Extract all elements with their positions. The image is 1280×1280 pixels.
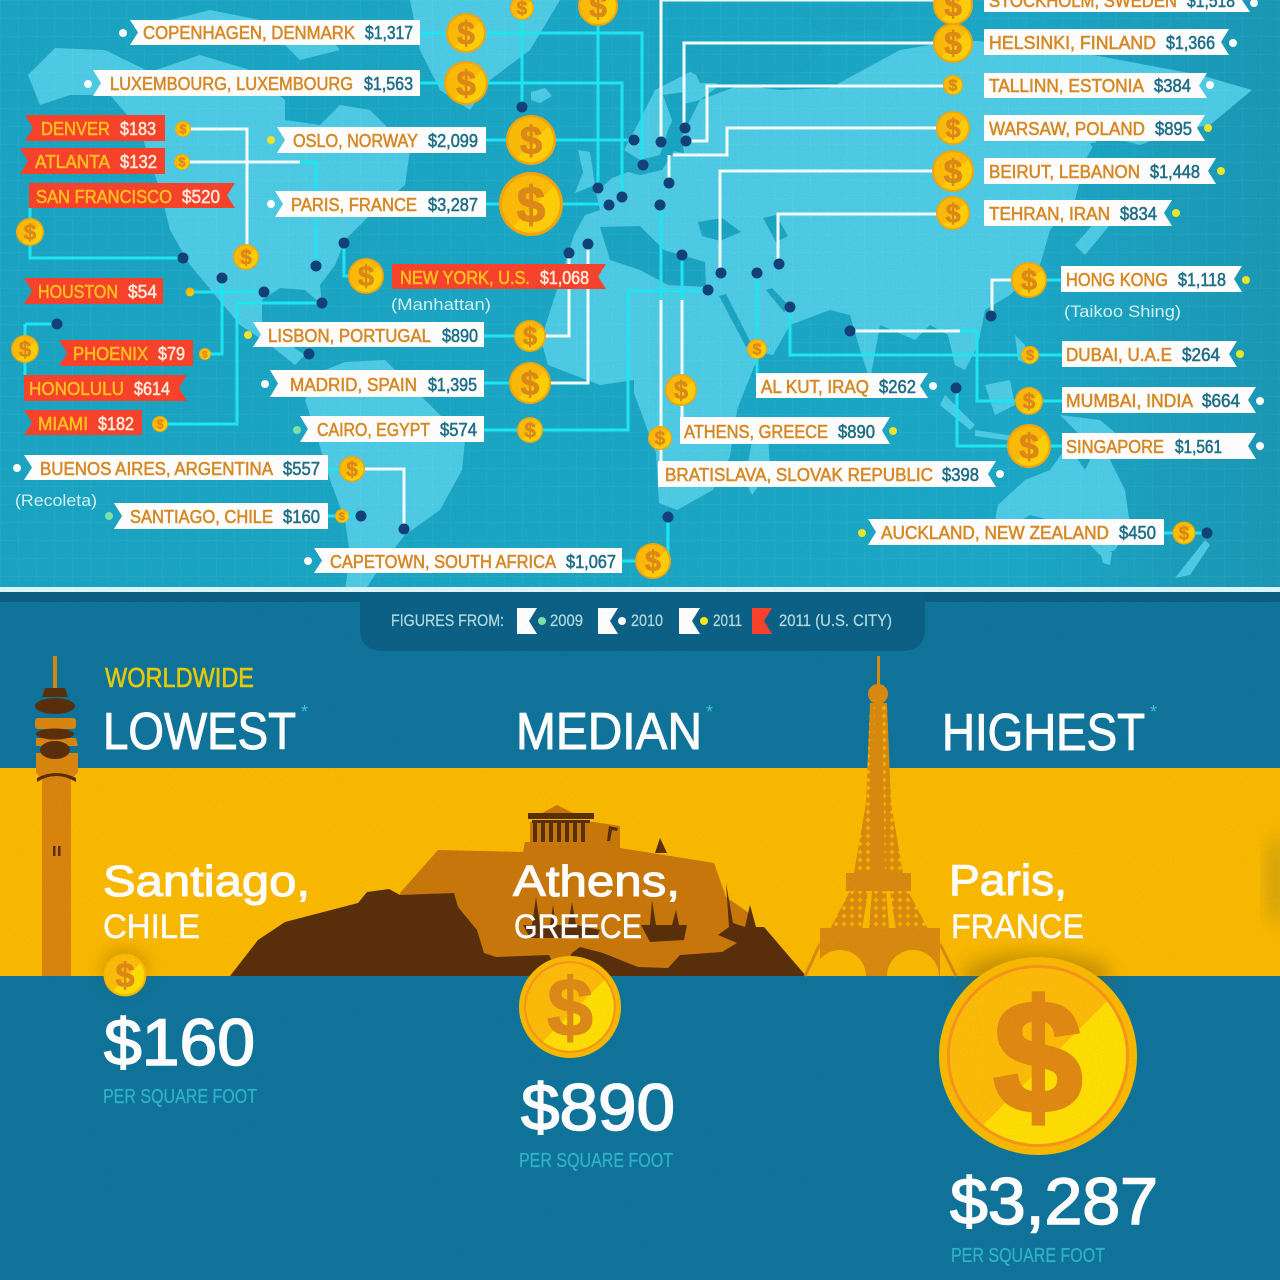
column: lowest: Santiago, <box>103 857 310 906</box>
city: Warsaw: WARSAW, POLAND <box>989 119 1145 139</box>
city: Buenos Aires: (Recoleta) <box>15 491 97 510</box>
US city: Phoenix: $ <box>202 349 208 360</box>
coin: top center markers <box>510 0 618 26</box>
city: Tallinn <box>943 73 1214 98</box>
US city: Miami: $ <box>156 416 164 431</box>
city: Al Kut <box>747 339 937 398</box>
city: Tehran <box>936 196 1180 230</box>
city: Paris: $ <box>517 176 545 233</box>
city: Hong Kong: $ <box>1021 265 1037 297</box>
city: Tehran: TEHRAN, IRAN <box>989 204 1110 224</box>
US city: Honolulu: $614 <box>134 379 170 399</box>
US city: Houston: HOUSTON <box>38 282 118 302</box>
US city: Phoenix: PHOENIX <box>73 344 148 364</box>
city: Helsinki: $ <box>944 25 962 61</box>
city: Lisbon <box>244 320 546 352</box>
city: Tallinn: TALLINN, ESTONIA <box>989 76 1144 96</box>
city: Lisbon: LISBON, PORTUGAL <box>268 326 431 346</box>
city: Madrid: MADRID, SPAIN <box>290 375 417 395</box>
city: Hong Kong: HONG KONG <box>1066 270 1168 290</box>
city: Luxembourg: LUXEMBOURG, LUXEMBOURG <box>110 74 353 94</box>
US city: Honolulu: $ <box>19 337 32 362</box>
city: Helsinki <box>933 23 1237 63</box>
city: Mumbai: MUMBAI, INDIA <box>1066 391 1193 411</box>
US city: San Francisco: $520 <box>182 187 220 207</box>
column: median: GREECE <box>514 908 642 946</box>
city: Helsinki: $1,366 <box>1166 33 1215 53</box>
column: median: $890 <box>521 1070 675 1144</box>
city: Copenhagen: $ <box>457 15 475 51</box>
column: highest: HIGHEST <box>942 704 1145 762</box>
column: lowest: CHILE <box>103 908 200 946</box>
city: Stockholm <box>933 0 1258 25</box>
US city: Atlanta: ATLANTA <box>35 152 110 172</box>
US city: Miami: MIAMI <box>38 414 88 434</box>
coin <box>939 957 1137 1155</box>
US city: Denver <box>25 115 191 141</box>
coin: $ <box>115 957 135 995</box>
US city: Denver: $183 <box>120 119 156 139</box>
column: lowest: * <box>301 702 308 722</box>
city: Athens: $ <box>674 377 688 405</box>
panel: world map <box>0 0 1280 590</box>
city: Tehran: $ <box>945 198 961 229</box>
column: median: PER SQUARE FOOT <box>519 1150 673 1172</box>
city: Al Kut: $262 <box>879 377 916 397</box>
city: Luxembourg: $ <box>456 64 476 103</box>
city: Mumbai <box>1015 387 1264 415</box>
city: Capetown: CAPETOWN, SOUTH AFRICA <box>330 552 556 572</box>
heading: worldwide: WORLDWIDE <box>105 662 254 693</box>
city: Singapore: $1,561 <box>1175 437 1222 457</box>
US city: Atlanta: $132 <box>120 152 157 172</box>
US city: Denver: $ <box>179 121 187 136</box>
column: median: Athens, <box>513 857 680 906</box>
city: Paris <box>267 172 563 236</box>
city: Dubai: $264 <box>1182 345 1220 365</box>
column: highest: FRANCE <box>951 908 1084 946</box>
column: lowest: LOWEST <box>103 703 296 761</box>
US city: Atlanta: $ <box>178 154 186 169</box>
city: Bratislava: $ <box>655 429 666 450</box>
city: Auckland: AUCKLAND, NEW ZEALAND <box>881 523 1109 543</box>
city: Hong Kong: $1,118 <box>1178 270 1226 290</box>
yellow band <box>0 768 1280 976</box>
city: Copenhagen <box>119 13 486 53</box>
US city: New York <box>348 258 606 314</box>
column: median: * <box>706 702 713 722</box>
smudge at right edge <box>1268 835 1280 925</box>
US city: Denver: DENVER <box>41 119 110 139</box>
city: Cairo: CAIRO, EGYPT <box>317 420 430 440</box>
city: Capetown: $ <box>645 546 661 578</box>
US city: San Francisco <box>16 183 235 246</box>
icon: Acropolis hill <box>230 805 806 976</box>
coin <box>519 956 621 1058</box>
city: Oslo: $2,099 <box>428 131 478 151</box>
coin <box>104 954 146 996</box>
city: Tallinn: $ <box>949 78 958 95</box>
column: lowest: PER SQUARE FOOT <box>103 1086 257 1108</box>
city: Warsaw: $ <box>945 113 961 144</box>
US city: Honolulu: HONOLULU <box>29 379 124 399</box>
city: Warsaw: $895 <box>1155 119 1192 139</box>
city: Santiago: $ <box>339 511 346 523</box>
city: Copenhagen: COPENHAGEN, DENMARK <box>143 23 355 43</box>
legend <box>360 592 925 651</box>
city: Dubai <box>1021 341 1244 367</box>
legend: 2010 <box>631 611 663 630</box>
city: Beirut: $1,448 <box>1150 162 1200 182</box>
column: median <box>513 702 713 1172</box>
US city: Miami <box>24 410 168 435</box>
city: Oslo <box>267 115 556 165</box>
column: highest: $3,287 <box>950 1164 1158 1238</box>
city: Cairo <box>293 416 543 443</box>
city: Auckland <box>858 519 1196 545</box>
city: Lisbon: $890 <box>442 326 478 346</box>
city: Luxembourg: $1,563 <box>364 74 413 94</box>
column: median: MEDIAN <box>516 703 702 761</box>
city: Buenos Aires: BUENOS AIRES, ARGENTINA <box>40 459 273 479</box>
city: Buenos Aires: $557 <box>283 459 320 479</box>
column: lowest <box>103 702 310 1108</box>
legend: 2009 <box>550 611 583 630</box>
panel: worldwide prices <box>0 587 1280 1280</box>
column: lowest: $160 <box>104 1005 255 1079</box>
city: Hong Kong <box>1011 262 1250 321</box>
city: Dubai: $ <box>1026 348 1034 364</box>
coin: $ <box>547 963 593 1054</box>
location dots <box>52 102 1212 538</box>
city: Cairo: $574 <box>440 420 477 440</box>
US city: New York: $ <box>358 261 374 293</box>
city: Singapore: $ <box>1019 427 1039 466</box>
column: highest <box>939 702 1158 1267</box>
US city: Houston <box>24 278 194 304</box>
column: highest: Paris, <box>949 856 1067 905</box>
city: Madrid: $ <box>521 366 540 403</box>
city: Singapore <box>1007 424 1264 468</box>
US city: Houston: $54 <box>128 282 157 302</box>
icon: Santiago tower <box>35 656 78 976</box>
column: highest: * <box>1150 702 1157 722</box>
city: Paris: $3,287 <box>428 195 478 215</box>
inland seas <box>600 6 1150 347</box>
US city: New York: (Manhattan) <box>391 295 491 314</box>
city: Al Kut: AL KUT, IRAQ <box>761 377 869 397</box>
city: Mumbai: $664 <box>1202 391 1240 411</box>
city: Dubai: DUBAI, U.A.E <box>1066 345 1172 365</box>
city: Santiago <box>105 503 349 529</box>
city: Tallinn: $384 <box>1154 76 1191 96</box>
city: Buenos Aires <box>13 455 365 510</box>
city: Beirut: $ <box>944 154 963 191</box>
city: Beirut <box>932 150 1225 192</box>
city: Madrid <box>261 362 551 404</box>
US city: Miami: $182 <box>98 414 134 434</box>
city: Lisbon: $ <box>523 323 537 351</box>
city: Bratislava: $398 <box>942 465 979 485</box>
city: Helsinki: HELSINKI, FINLAND <box>989 33 1156 53</box>
US city: San Francisco: SAN FRANCISCO <box>36 187 172 207</box>
city: Auckland: $450 <box>1119 523 1156 543</box>
coin: Denver map marker <box>233 244 259 270</box>
city: Mumbai: $ <box>1023 389 1036 414</box>
connector lines <box>25 0 1208 561</box>
city: Bratislava <box>648 426 1004 487</box>
legend: 2011 (U.S. CITY) <box>779 611 892 630</box>
city: Auckland: $ <box>1179 522 1189 543</box>
US city: Atlanta <box>20 148 190 174</box>
US city: San Francisco: $ <box>24 220 37 245</box>
coin: $ <box>994 968 1082 1145</box>
city: Warsaw <box>936 111 1212 145</box>
world map land masses <box>28 0 1252 590</box>
city: Paris: PARIS, FRANCE <box>291 195 417 215</box>
icon: Eiffel tower <box>805 656 956 976</box>
city: Athens <box>665 374 897 444</box>
city: Bratislava: BRATISLAVA, SLOVAK REPUBLIC <box>665 465 933 485</box>
legend: FIGURES FROM: <box>391 611 504 630</box>
city: Athens: ATHENS, GREECE <box>684 422 828 442</box>
column: highest: PER SQUARE FOOT <box>951 1245 1105 1267</box>
city: Al Kut: $ <box>753 342 762 359</box>
city: Santiago: $160 <box>283 507 320 527</box>
city: Copenhagen: $1,317 <box>365 23 413 43</box>
coin: Denver map marker: $ <box>240 246 252 269</box>
city: Hong Kong: (Taikoo Shing) <box>1064 302 1181 321</box>
city: Madrid: $1,395 <box>428 375 477 395</box>
legend: 2011 <box>713 611 742 630</box>
city: Athens: $890 <box>838 422 875 442</box>
city: Luxembourg <box>84 61 488 105</box>
city: Oslo: $ <box>520 119 542 163</box>
US city: Phoenix <box>59 340 211 366</box>
city: Buenos Aires: $ <box>346 458 358 481</box>
city: Santiago: SANTIAGO, CHILE <box>130 507 273 527</box>
city: Capetown: $1,067 <box>566 552 616 572</box>
city: Oslo: OSLO, NORWAY <box>293 131 418 151</box>
US city: New York: $1,068 <box>540 268 589 288</box>
US city: Phoenix: $79 <box>158 344 185 364</box>
city: Beirut: BEIRUT, LEBANON <box>989 162 1140 182</box>
city: Cairo: $ <box>524 419 536 442</box>
city: Tehran: $834 <box>1120 204 1157 224</box>
US city: New York: NEW YORK, U.S. <box>400 268 530 288</box>
US city: Honolulu <box>11 335 187 401</box>
city: Capetown <box>304 543 671 579</box>
city: Singapore: SINGAPORE <box>1066 437 1164 457</box>
